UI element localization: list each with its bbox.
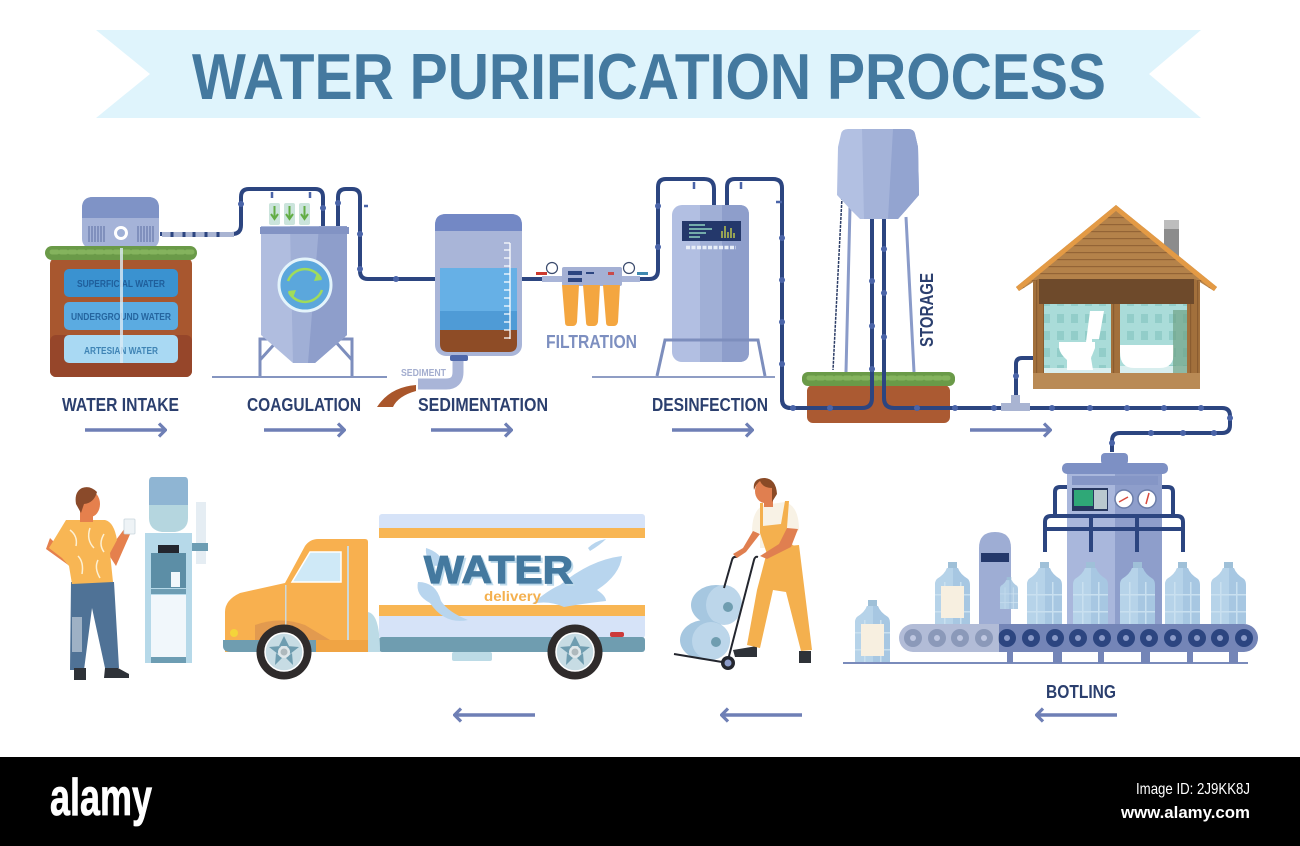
pump housing	[82, 197, 159, 249]
image id: Image ID: 2J9KK8J	[1136, 781, 1250, 798]
watermark patch	[72, 617, 82, 652]
panel: delivery truck	[223, 514, 645, 680]
water layer: superficial: SUPERFICIAL WATER	[77, 278, 165, 290]
panel: house	[1016, 205, 1217, 389]
overalls	[760, 501, 798, 554]
legs	[260, 339, 352, 376]
delivery text: delivery	[484, 588, 541, 604]
soil block	[807, 385, 950, 423]
flow arrows: top row	[85, 428, 1050, 432]
footer bar	[0, 757, 1300, 846]
headlight	[230, 629, 238, 637]
rollers	[904, 629, 1253, 647]
pipes over soil	[782, 219, 950, 408]
arm: hand on hip	[46, 538, 80, 572]
water	[440, 268, 517, 330]
water logo: WATER	[426, 551, 575, 594]
water bottle	[149, 477, 188, 532]
tank body	[261, 226, 347, 363]
sediment	[440, 330, 517, 352]
soil	[50, 258, 192, 377]
water layer: artesian: ARTESIAN WATER	[84, 345, 158, 357]
dosing funnels	[269, 203, 310, 225]
conveyor belt	[899, 624, 1258, 652]
panel: coagulation tank	[212, 203, 387, 378]
water splash	[418, 539, 622, 621]
panel: bottling line	[843, 453, 1258, 702]
bottles	[935, 562, 1246, 624]
shirt pattern	[70, 528, 104, 578]
water layer: artesian	[64, 335, 178, 363]
pipe fitting	[542, 276, 640, 282]
gauges	[546, 262, 558, 274]
standalone bottle	[855, 600, 890, 662]
cooler	[145, 533, 192, 663]
panel: sedimentation tank	[377, 214, 522, 407]
tail light	[610, 632, 624, 637]
machine body	[1067, 470, 1162, 624]
shoes	[74, 668, 129, 680]
box body	[379, 514, 645, 638]
walls	[1033, 278, 1200, 389]
window: bath	[1120, 304, 1187, 373]
orange filters	[562, 285, 620, 326]
small tank	[979, 532, 1011, 624]
ground line	[212, 376, 387, 378]
glass	[124, 519, 135, 534]
panel: man at water cooler	[46, 477, 208, 680]
sediment outflow	[377, 385, 416, 407]
heading: WATER PURIFICATION PROCESS	[192, 40, 1106, 113]
water intake label: WATER INTAKE	[62, 395, 179, 415]
panel: worker with trolley	[674, 478, 812, 670]
legs	[747, 545, 812, 651]
flow arrows: bottom row	[455, 713, 1117, 717]
well shaft	[120, 248, 123, 363]
window: toilet	[1044, 304, 1111, 373]
filtration label: FILTRATION	[546, 332, 637, 352]
cab window	[292, 552, 341, 582]
panel: disinfection tank	[592, 205, 775, 378]
chassis	[379, 637, 645, 652]
filling manifold	[1045, 487, 1183, 552]
cab	[225, 539, 368, 652]
front wheel	[256, 624, 312, 680]
pipe collars	[790, 246, 920, 411]
panel: filtration unit	[536, 262, 648, 352]
gauges	[1115, 490, 1133, 508]
sediment label: SEDIMENT	[401, 368, 446, 379]
sedimentation label: SEDIMENTATION	[418, 395, 548, 415]
conveyor legs	[1007, 652, 1238, 663]
step labels: top row	[62, 395, 768, 415]
trolley	[674, 557, 758, 663]
tank body	[672, 205, 749, 362]
title banner	[96, 30, 1201, 118]
panel: water intake	[45, 197, 197, 377]
sediment drain	[418, 357, 458, 384]
storage label: STORAGE	[917, 273, 937, 347]
scale	[504, 243, 510, 339]
ground line	[843, 662, 1248, 664]
pipes: upper network	[160, 179, 1233, 452]
legs	[657, 340, 765, 376]
ground line	[592, 376, 775, 378]
ribbon	[96, 30, 1201, 118]
chimney	[1164, 220, 1179, 256]
water layer: underground	[64, 302, 178, 330]
shirt	[49, 520, 117, 584]
man	[46, 487, 135, 680]
panel: storage water tower	[782, 129, 955, 423]
mixing icon	[279, 259, 331, 311]
grass	[802, 372, 955, 386]
arms	[733, 528, 798, 559]
display	[682, 221, 741, 241]
shirt	[752, 502, 799, 548]
website: www.alamy.com	[1120, 803, 1250, 822]
cup dispenser	[192, 502, 208, 564]
water logo: WATER	[424, 549, 573, 592]
head	[754, 478, 777, 507]
control box	[562, 267, 622, 286]
grass	[45, 246, 197, 260]
shoes	[733, 646, 811, 663]
legs	[70, 582, 119, 670]
rear wheel	[548, 624, 602, 680]
water layer: underground: UNDERGROUND WATER	[71, 311, 171, 323]
control screen	[1072, 488, 1108, 511]
ladder	[833, 197, 842, 370]
tower legs	[846, 207, 914, 372]
botling label: BOTLING	[1046, 682, 1116, 702]
tank shell	[435, 214, 522, 356]
water jugs	[680, 585, 742, 660]
tank	[837, 129, 919, 219]
roof	[1016, 205, 1217, 291]
coagulation label: COAGULATION	[247, 395, 361, 415]
alamy logo: alamy	[50, 769, 152, 827]
buttons	[686, 246, 736, 249]
desinfection label: DESINFECTION	[652, 395, 768, 415]
head	[76, 487, 100, 522]
arm: holding glass	[107, 528, 131, 566]
water layer: superficial	[64, 269, 178, 297]
